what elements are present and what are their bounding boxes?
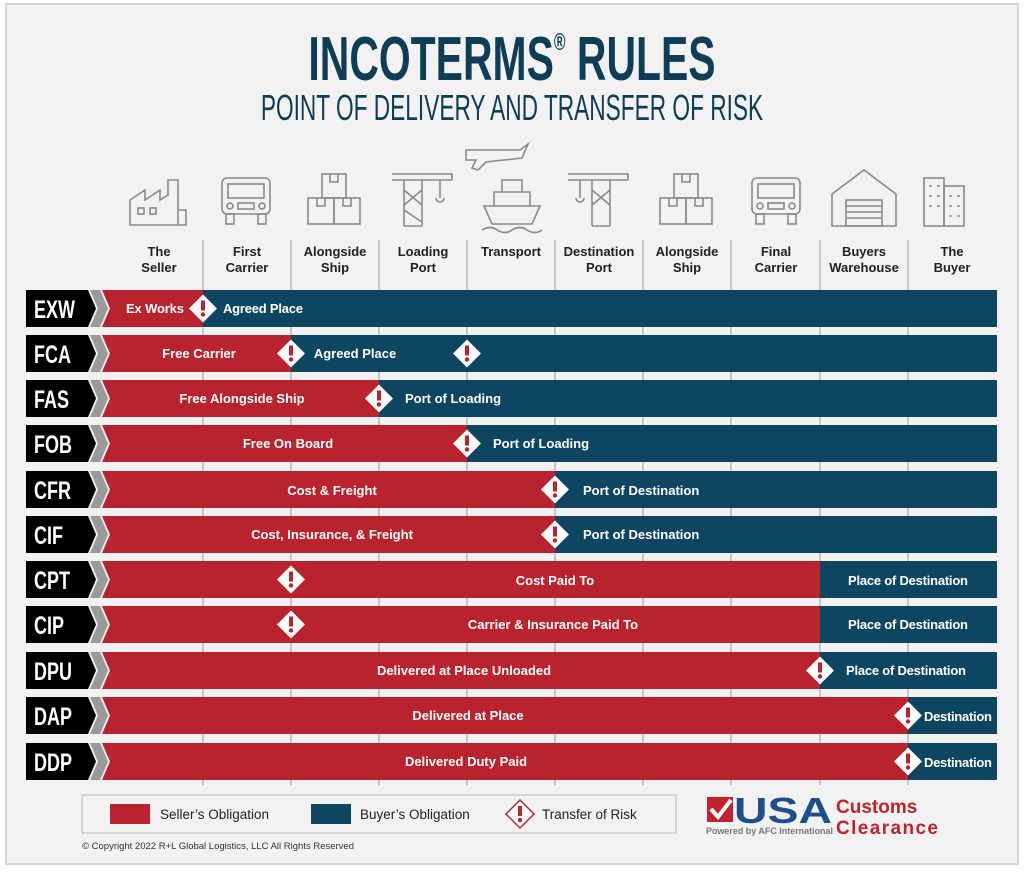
- rows: [26, 290, 997, 780]
- row CFR: [26, 471, 997, 508]
- column labels: The: [940, 244, 964, 259]
- row CPT: Place of Destination: [848, 573, 968, 588]
- row DDP: [26, 743, 997, 780]
- row CFR: CFR: [34, 476, 71, 505]
- row DPU: Delivered at Place Unloaded: [377, 663, 551, 678]
- legend: [82, 795, 676, 833]
- logo: USA: [734, 790, 832, 831]
- subtitle: POINT OF DELIVERY AND TRANSFER OF RISK: [261, 89, 763, 128]
- column labels: Buyer: [934, 260, 970, 275]
- row DPU: DPU: [34, 657, 72, 686]
- copyright: © Copyright 2022 R+L Global Logistics, LLC All Rights Reserved: [82, 841, 354, 852]
- row CIP: Place of Destination: [848, 617, 968, 632]
- title: RULES: [566, 25, 716, 94]
- column labels: Final: [761, 244, 791, 259]
- row CPT: CPT: [34, 566, 71, 595]
- logo: Clearance: [836, 818, 938, 839]
- icon: truck: [222, 178, 270, 224]
- row CIP: [26, 606, 997, 643]
- column labels: Alongside: [304, 244, 366, 259]
- logo: Powered by AFC International: [706, 826, 833, 836]
- row DDP: Destination: [924, 755, 992, 770]
- row DAP: DAP: [34, 702, 72, 731]
- legend: Transfer of Risk: [542, 807, 637, 822]
- icon: building: [924, 178, 964, 226]
- row CFR: Port of Destination: [583, 483, 699, 498]
- icon: ship: [482, 180, 542, 232]
- legend: Buyer’s Obligation: [360, 807, 470, 822]
- column labels: Transport: [481, 244, 542, 259]
- column labels: Carrier: [755, 260, 797, 275]
- row EXW: Agreed Place: [223, 301, 303, 316]
- row CPT: [26, 561, 997, 598]
- row EXW: [26, 290, 997, 327]
- row FOB: FOB: [34, 430, 72, 459]
- row FOB: Free On Board: [243, 436, 333, 451]
- row DAP: Delivered at Place: [412, 708, 524, 723]
- logo: Customs: [836, 797, 917, 818]
- column labels: [141, 244, 970, 275]
- row FAS: [26, 380, 997, 417]
- column labels: Carrier: [226, 260, 268, 275]
- row FAS: Free Alongside Ship: [179, 391, 305, 406]
- row FAS: FAS: [34, 385, 69, 414]
- column labels: Ship: [673, 260, 701, 275]
- icon: destination crane: [568, 174, 628, 226]
- row CPT: Cost Paid To: [516, 573, 594, 588]
- icon: port crane: [392, 174, 452, 226]
- row DDP: DDP: [34, 748, 72, 777]
- column grid lines: [203, 240, 908, 785]
- row EXW: EXW: [34, 295, 75, 324]
- title: INCOTERMS: [308, 25, 554, 94]
- column labels: First: [233, 244, 262, 259]
- title: ®: [554, 30, 566, 56]
- row FAS: Port of Loading: [405, 391, 501, 406]
- row CIF: CIF: [34, 521, 63, 550]
- column labels: Warehouse: [829, 260, 899, 275]
- title: [308, 25, 716, 94]
- row FCA: Free Carrier: [162, 346, 236, 361]
- row CIP: Carrier & Insurance Paid To: [468, 617, 638, 632]
- column labels: Port: [410, 260, 437, 275]
- column labels: Port: [586, 260, 613, 275]
- legend: Seller’s Obligation: [160, 807, 269, 822]
- row EXW: Ex Works: [126, 301, 184, 316]
- column labels: The: [147, 244, 171, 259]
- row CIF: Cost, Insurance, & Freight: [251, 527, 414, 542]
- icon: plane: [466, 144, 528, 170]
- column labels: Ship: [321, 260, 349, 275]
- column labels: Buyers: [842, 244, 886, 259]
- row CFR: Cost & Freight: [287, 483, 377, 498]
- column labels: Destination: [564, 244, 634, 259]
- row FCA: [26, 335, 997, 372]
- row FCA: Agreed Place: [314, 346, 396, 361]
- row CIF: Port of Destination: [583, 527, 699, 542]
- row FCA: FCA: [34, 340, 71, 369]
- row DDP: Delivered Duty Paid: [405, 754, 527, 769]
- icons row: [130, 144, 964, 232]
- row DAP: [26, 697, 997, 734]
- icon: boxes: [308, 174, 360, 224]
- column labels: Alongside: [656, 244, 718, 259]
- icon: warehouse: [832, 170, 896, 226]
- row CIP: CIP: [34, 611, 64, 640]
- icon: factory: [130, 180, 186, 225]
- row CIF: [26, 516, 997, 553]
- row FOB: Port of Loading: [493, 436, 589, 451]
- row DPU: [26, 652, 997, 689]
- column labels: Seller: [141, 260, 177, 275]
- row DAP: Destination: [924, 709, 992, 724]
- row DPU: Place of Destination: [846, 663, 966, 678]
- icon: final truck: [752, 178, 800, 224]
- row FOB: [26, 425, 997, 462]
- column labels: Loading: [398, 244, 448, 259]
- icon: boxes 2: [660, 174, 712, 224]
- logo: [706, 790, 938, 839]
